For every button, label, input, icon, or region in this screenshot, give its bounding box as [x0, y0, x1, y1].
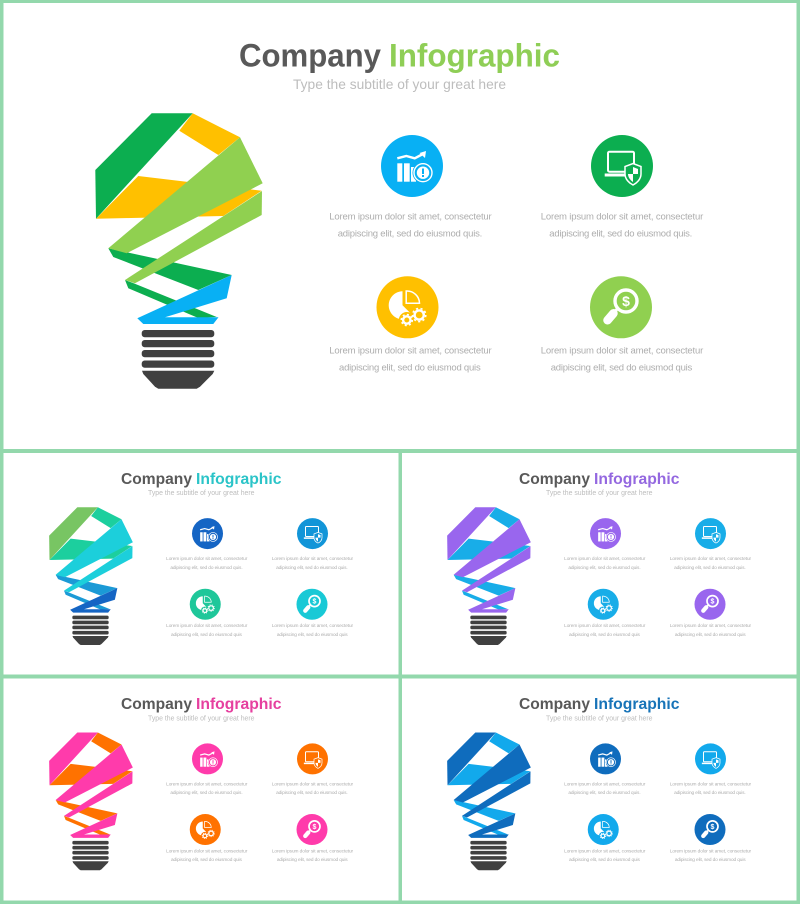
icon: magnifier dollar: $	[313, 824, 317, 831]
text block: top left: adipiscing elit, sed do eiusmod quis.	[170, 565, 243, 571]
text block: top left: Lorem ipsum dolor sit amet, consectetur	[564, 556, 646, 562]
text block: top right: Lorem ipsum dolor sit amet, consectetur	[670, 556, 752, 562]
text block: bottom right: Lorem ipsum dolor sit amet, consectetur	[670, 849, 752, 855]
title: Company	[239, 38, 381, 74]
icon: pie chart gears	[190, 814, 221, 845]
text block: bottom left	[329, 345, 492, 374]
light bulb	[447, 733, 531, 870]
text block: top left: Lorem ipsum dolor sit amet, consectetur	[564, 782, 646, 788]
text block: bottom right	[272, 849, 354, 863]
text block: top right: Lorem ipsum dolor sit amet, consectetur	[670, 782, 752, 788]
subtitle: Type the subtitle of your great here	[546, 715, 653, 722]
text block: bottom left	[166, 623, 248, 638]
text block: top right	[272, 556, 354, 571]
text block: bottom right: Lorem ipsum dolor sit amet, consectetur	[272, 623, 354, 629]
text block: top left: Lorem ipsum dolor sit amet, consectetur	[166, 556, 248, 562]
text block: bottom left: Lorem ipsum dolor sit amet, consectetur	[329, 345, 492, 356]
panel: blue variant	[447, 696, 752, 870]
icon: magnifier dollar	[296, 589, 328, 620]
text block: bottom right: adipiscing elit, sed do eiusmod quis	[277, 857, 348, 863]
text block: top right	[670, 782, 752, 796]
panel: pink variant	[49, 696, 354, 870]
panel: purple variant	[447, 471, 752, 645]
title: Infographic	[594, 471, 680, 488]
subtitle: Type the subtitle of your great here	[546, 490, 653, 497]
text block: top right: Lorem ipsum dolor sit amet, consectetur	[272, 782, 354, 788]
icon: laptop shield	[695, 743, 726, 774]
panel: teal variant	[49, 471, 354, 645]
text block: top left: Lorem ipsum dolor sit amet, consectetur	[166, 782, 248, 788]
text block: bottom right: Lorem ipsum dolor sit amet, consectetur	[541, 345, 703, 356]
icon: laptop shield	[297, 743, 328, 774]
icon: laptop shield	[695, 518, 726, 549]
text block: top right: adipiscing elit, sed do eiusmod quis.	[276, 565, 348, 571]
text block: top left: adipiscing elit, sed do eiusmod quis.	[338, 229, 482, 240]
icon: chart alert	[192, 518, 223, 549]
icon: chart alert	[590, 518, 621, 549]
icon: laptop shield	[297, 518, 328, 549]
panel: main green slide	[95, 38, 703, 389]
text block: top right: adipiscing elit, sed do eiusmod quis.	[276, 790, 348, 796]
icon: pie chart gears	[190, 589, 221, 620]
title: Infographic	[196, 471, 282, 488]
icon: magnifier dollar: $	[711, 824, 715, 831]
text block: top left: adipiscing elit, sed do eiusmod quis.	[568, 565, 641, 571]
icon: pie chart gears	[588, 589, 619, 620]
text block: bottom right: Lorem ipsum dolor sit amet, consectetur	[272, 849, 354, 855]
text block: top right: Lorem ipsum dolor sit amet, consectetur	[541, 211, 703, 222]
title	[519, 696, 680, 713]
text block: bottom left: Lorem ipsum dolor sit amet, consectetur	[166, 849, 248, 855]
title	[519, 471, 680, 488]
subtitle: Type the subtitle of your great here	[293, 76, 506, 92]
icon: magnifier dollar	[694, 814, 726, 845]
text block: top right: adipiscing elit, sed do eiusmod quis.	[674, 565, 746, 571]
light bulb	[447, 507, 531, 645]
text block: bottom right: adipiscing elit, sed do eiusmod quis	[277, 632, 348, 638]
light bulb	[49, 507, 133, 645]
icon: magnifier dollar	[694, 589, 726, 620]
text block: bottom left: adipiscing elit, sed do eiusmod quis	[171, 857, 242, 863]
text block: top left	[166, 782, 248, 796]
text block: bottom right	[541, 345, 703, 374]
text block: top left	[564, 556, 646, 571]
title: Infographic	[389, 38, 560, 74]
text block: bottom left: adipiscing elit, sed do eiusmod quis	[569, 857, 640, 863]
icon: magnifier dollar: $	[622, 293, 630, 309]
text block: bottom left	[564, 623, 646, 638]
text block: bottom right: adipiscing elit, sed do eiusmod quis	[551, 363, 693, 374]
title: Company	[121, 696, 192, 713]
title: Infographic	[594, 696, 680, 713]
title	[121, 471, 282, 488]
text block: bottom left: adipiscing elit, sed do eiusmod quis	[569, 632, 640, 638]
text block: bottom left: adipiscing elit, sed do eiusmod quis	[339, 363, 481, 374]
icon: magnifier dollar	[296, 814, 328, 845]
text block: bottom right: Lorem ipsum dolor sit amet, consectetur	[670, 623, 752, 629]
icon: magnifier dollar: $	[313, 599, 317, 606]
title	[239, 38, 560, 74]
subtitle: Type the subtitle of your great here	[148, 490, 255, 497]
icon: pie chart gears	[588, 814, 619, 845]
text block: top left	[166, 556, 248, 571]
text block: bottom right	[272, 623, 354, 638]
icon: laptop shield	[591, 135, 653, 197]
text block: bottom left: adipiscing elit, sed do eiusmod quis	[171, 632, 242, 638]
title: Infographic	[196, 696, 282, 713]
title: Company	[519, 471, 590, 488]
text block: top right: adipiscing elit, sed do eiusmod quis.	[674, 790, 746, 796]
text block: bottom left	[564, 849, 646, 863]
text block: top left: adipiscing elit, sed do eiusmod quis.	[170, 790, 243, 796]
text block: top right: Lorem ipsum dolor sit amet, consectetur	[272, 556, 354, 562]
light bulb	[49, 733, 133, 870]
text block: bottom left: Lorem ipsum dolor sit amet, consectetur	[166, 623, 248, 629]
icon: magnifier dollar: $	[711, 599, 715, 606]
icon: chart alert	[192, 743, 223, 774]
text block: top right	[272, 782, 354, 796]
icon: chart alert	[381, 135, 443, 197]
text block: top left: adipiscing elit, sed do eiusmod quis.	[568, 790, 641, 796]
text block: top right	[541, 211, 703, 240]
text block: bottom right: adipiscing elit, sed do eiusmod quis	[675, 632, 746, 638]
icon: magnifier dollar	[590, 276, 652, 338]
title	[121, 696, 282, 713]
light bulb	[95, 113, 263, 389]
icon: pie chart gears	[376, 276, 438, 338]
text block: bottom left	[166, 849, 248, 863]
text block: bottom left: Lorem ipsum dolor sit amet, consectetur	[564, 623, 646, 629]
title: Company	[519, 696, 590, 713]
text block: top right	[670, 556, 752, 571]
text block: bottom left: Lorem ipsum dolor sit amet, consectetur	[564, 849, 646, 855]
text block: top left	[564, 782, 646, 796]
text block: bottom right: adipiscing elit, sed do eiusmod quis	[675, 857, 746, 863]
icon: chart alert	[590, 743, 621, 774]
text block: top left	[329, 211, 492, 240]
text block: top right: adipiscing elit, sed do eiusmod quis.	[549, 229, 692, 240]
text block: top left: Lorem ipsum dolor sit amet, consectetur	[329, 211, 492, 222]
text block: bottom right	[670, 849, 752, 863]
subtitle: Type the subtitle of your great here	[148, 715, 255, 722]
title: Company	[121, 471, 192, 488]
text block: bottom right	[670, 623, 752, 638]
